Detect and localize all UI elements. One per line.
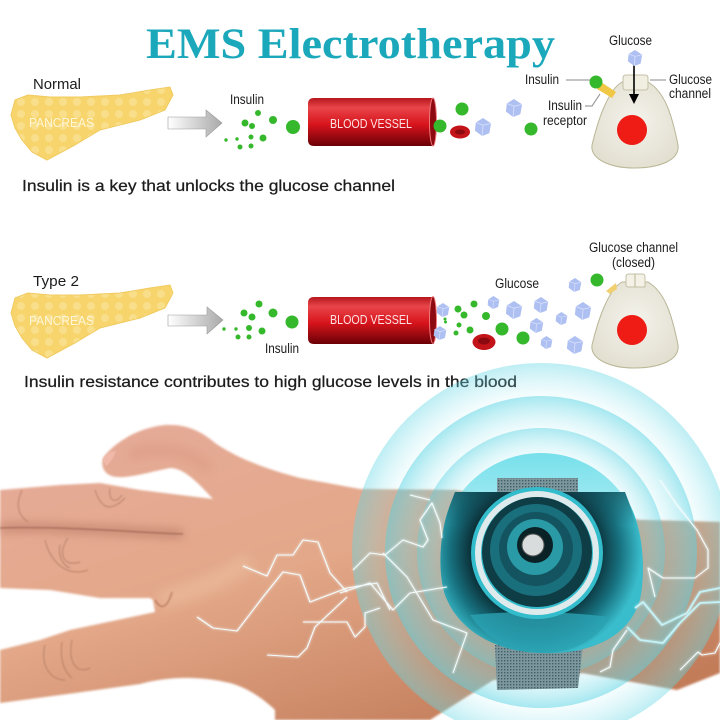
- cell labels: channel: [669, 86, 711, 101]
- cell labels: Glucose: [495, 276, 539, 291]
- thumb nail: [103, 451, 116, 466]
- pancreas: PANCREAS: [29, 313, 94, 328]
- pancreas: PANCREAS: [29, 115, 94, 130]
- panel: normal insulin pathway: [11, 33, 712, 195]
- blood vessel: [308, 296, 436, 344]
- pulse rings: [352, 363, 720, 720]
- cell labels: [495, 240, 678, 291]
- title: EMS Electrotherapy: [146, 21, 556, 68]
- watch device: [440, 478, 643, 690]
- cell labels: Glucose channel: [589, 240, 678, 255]
- cell labels: Glucose: [669, 72, 712, 87]
- blood particles: [434, 274, 604, 354]
- panel: type 2 insulin resistance: [11, 240, 678, 391]
- label: Insulin: Insulin: [230, 92, 264, 107]
- blood particles: [434, 99, 538, 138]
- blood vessel: [308, 98, 436, 146]
- caption: Insulin is a key that unlocks the glucose channel: [22, 178, 395, 195]
- finger creases: [0, 488, 183, 680]
- device body: [440, 492, 643, 653]
- label: Type 2: Type 2: [33, 273, 79, 290]
- cell labels: Insulin: [525, 72, 559, 87]
- cell labels: Insulin: [548, 98, 582, 113]
- cell labels: receptor: [543, 113, 587, 128]
- caption: Insulin resistance contributes to high glucose levels in the blood: [24, 374, 517, 391]
- pancreas: [11, 285, 173, 358]
- skin shading: [0, 450, 250, 600]
- photo: hand and wrist: [0, 425, 720, 720]
- label: Insulin: Insulin: [265, 341, 299, 356]
- cell labels: (closed): [612, 255, 655, 270]
- cell with open glucose channel: [590, 50, 678, 168]
- cell with closed glucose channel: [592, 274, 678, 368]
- cell labels: [525, 33, 712, 128]
- electrode dial: [471, 487, 603, 619]
- cell labels: Glucose: [609, 33, 652, 48]
- arrow: [168, 307, 223, 334]
- electric arcs: [197, 480, 720, 673]
- strap: [495, 478, 583, 690]
- arrow: [168, 110, 222, 137]
- label: Normal: Normal: [33, 76, 81, 93]
- pancreas: [11, 87, 173, 160]
- insulin dots: [222, 300, 298, 340]
- insulin dots: [224, 110, 300, 150]
- blood vessel: BLOOD VESSEL: [330, 312, 412, 327]
- blood vessel: BLOOD VESSEL: [330, 116, 412, 131]
